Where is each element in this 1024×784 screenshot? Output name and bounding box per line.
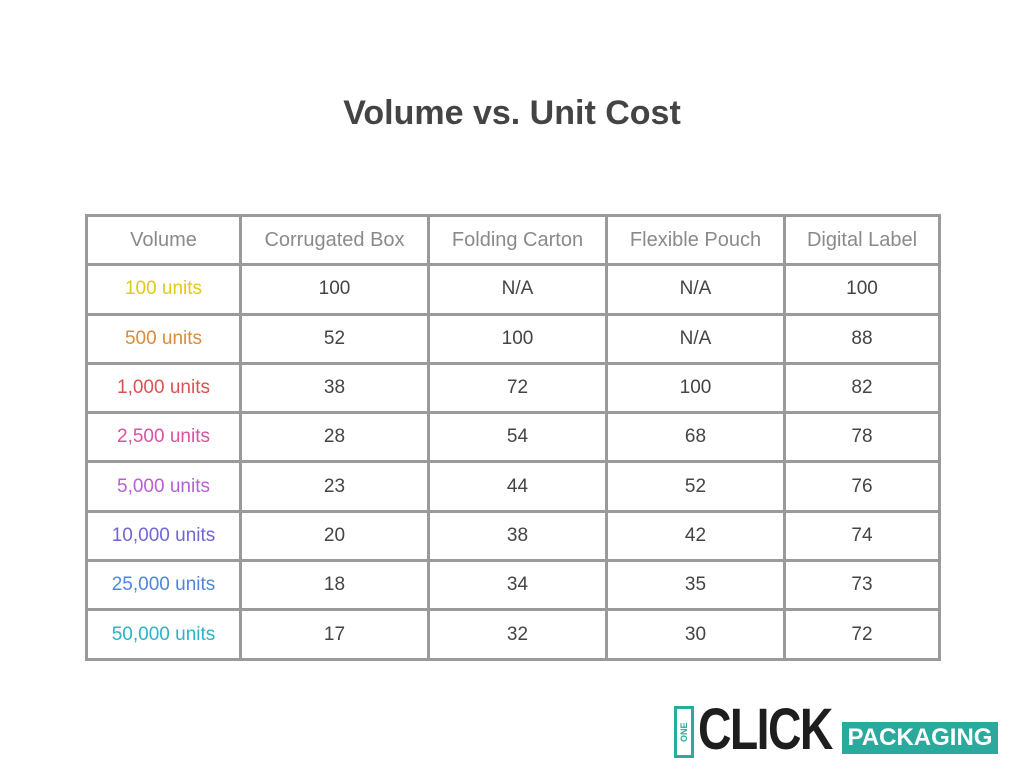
table: volume vs unit cost: 30: [685, 624, 706, 645]
table: volume vs unit cost: 38: [324, 377, 345, 398]
table: volume vs unit cost: 34: [507, 574, 528, 595]
table: volume vs unit cost: 100: [319, 278, 350, 299]
table: volume vs unit cost: 42: [685, 525, 706, 546]
table: volume vs unit cost: 52: [324, 328, 345, 349]
table: volume vs unit cost: 72: [851, 624, 873, 645]
table: volume vs unit cost: 54: [507, 426, 528, 447]
table: volume vs unit cost: N/A: [680, 278, 711, 299]
table: volume vs unit cost: 32: [507, 624, 528, 645]
table: volume vs unit cost: 20: [324, 525, 345, 546]
table: volume vs unit cost: 76: [851, 476, 873, 497]
table: volume vs unit cost: 2,500 units: [117, 426, 210, 447]
logo mark: ONE 1: ONE: [679, 722, 689, 742]
table: volume vs unit cost: 38: [507, 525, 528, 546]
table: volume vs unit cost: 100 units: [125, 278, 202, 299]
table: volume vs unit cost: Corrugated Box: [264, 229, 405, 251]
logo mark: ONE 1: [674, 706, 694, 758]
table: volume vs unit cost: 44: [507, 476, 528, 497]
table: volume vs unit cost: 88: [851, 328, 873, 349]
table: volume vs unit cost: 100: [502, 328, 533, 349]
table: volume vs unit cost: 68: [685, 426, 706, 447]
table: volume vs unit cost: 100: [846, 278, 878, 299]
table: volume vs unit cost: 23: [324, 476, 345, 497]
table: volume vs unit cost: Flexible Pouch: [630, 229, 761, 251]
table: volume vs unit cost: 52: [685, 476, 706, 497]
table: volume vs unit cost: Volume: [130, 229, 197, 251]
logo text: CLICK: CLICK: [698, 697, 832, 762]
table: volume vs unit cost: 18: [324, 574, 345, 595]
table: volume vs unit cost: 78: [851, 426, 873, 447]
table: volume vs unit cost: Digital Label: [807, 229, 917, 251]
title: Volume vs. Unit Cost: [343, 94, 681, 132]
logo badge: PACKAGING: PACKAGING: [848, 724, 992, 751]
table: volume vs unit cost: 25,000 units: [112, 574, 215, 595]
table: volume vs unit cost: 500 units: [125, 328, 202, 349]
logo: One Click Packaging: [674, 697, 998, 762]
table: volume vs unit cost: 10,000 units: [112, 525, 215, 546]
table: volume vs unit cost: N/A: [680, 328, 711, 349]
table: volume vs unit cost: [85, 214, 941, 661]
table: volume vs unit cost: 17: [324, 624, 345, 645]
table: volume vs unit cost: N/A: [502, 278, 533, 299]
table: volume vs unit cost: 72: [507, 377, 528, 398]
table: volume vs unit cost: Folding Carton: [452, 229, 583, 251]
table: volume vs unit cost: 100: [680, 377, 711, 398]
table: volume vs unit cost: 35: [685, 574, 706, 595]
table: volume vs unit cost: 1,000 units: [117, 377, 210, 398]
table: volume vs unit cost: 73: [851, 574, 873, 595]
table: volume vs unit cost: 28: [324, 426, 345, 447]
table: volume vs unit cost: 82: [851, 377, 873, 398]
table: volume vs unit cost: 5,000 units: [117, 476, 210, 497]
table: volume vs unit cost: 74: [851, 525, 873, 546]
table: volume vs unit cost: 50,000 units: [112, 624, 215, 645]
